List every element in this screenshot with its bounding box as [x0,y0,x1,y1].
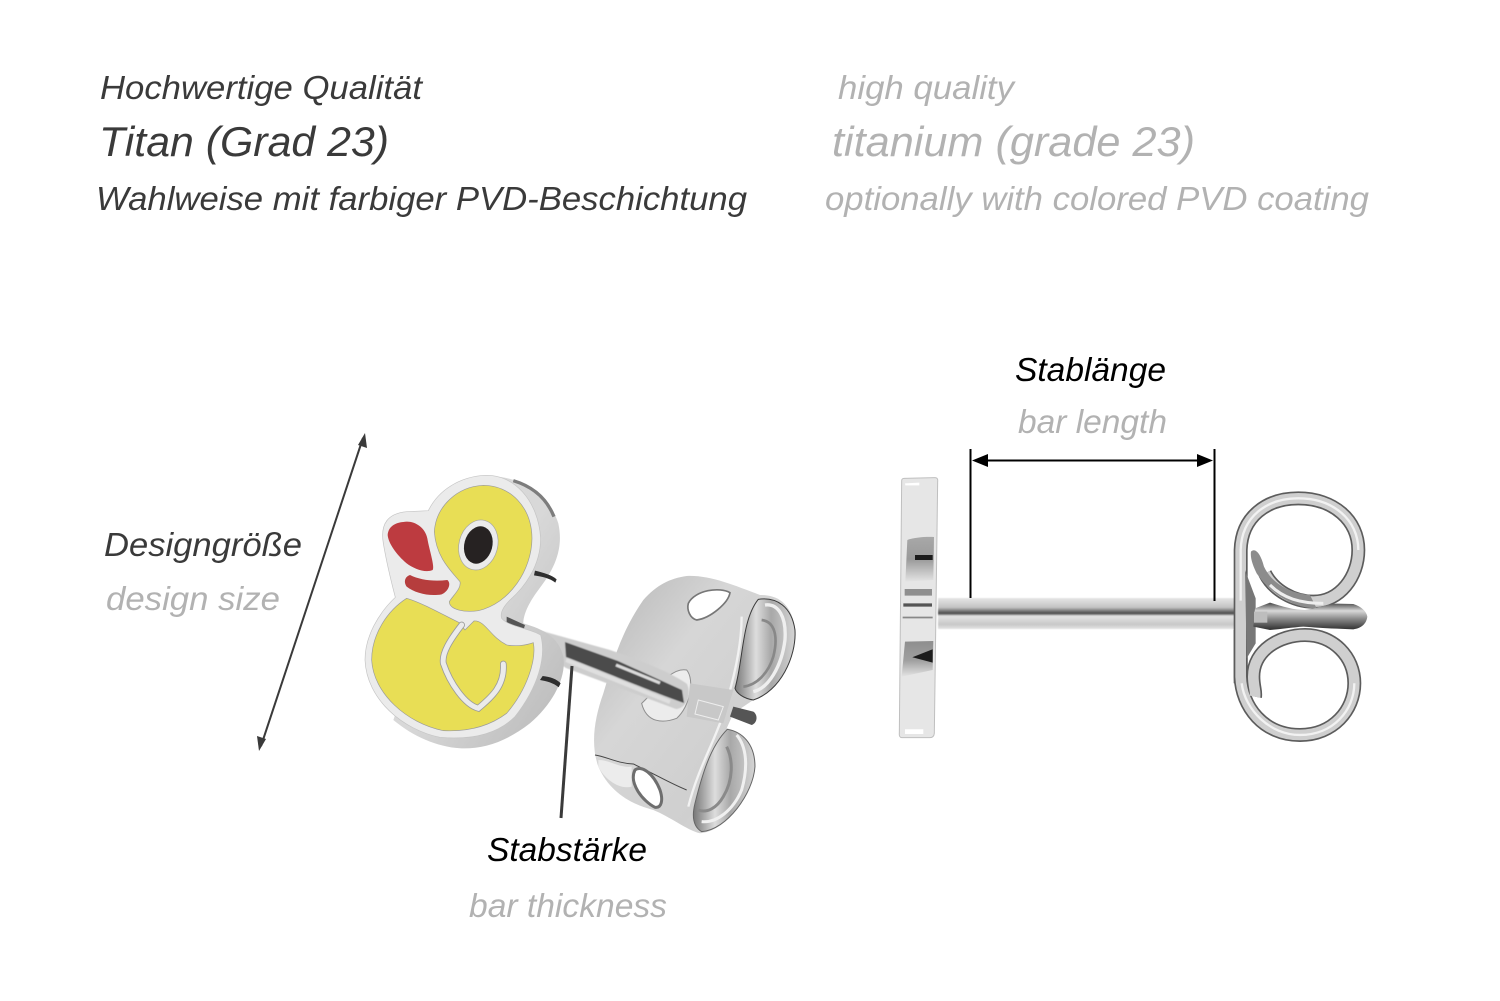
heading: German material: Titan (Grad 23) [99,118,389,165]
duck beak top [388,522,433,571]
duck stud [365,475,564,748]
butterfly back, side view [1237,498,1367,735]
arrow: design size [257,433,367,751]
coil tail [1251,550,1317,608]
plate lower crease [595,755,687,790]
duck side reflection lower [540,676,561,687]
clutch sleeve [687,683,733,723]
upper hole [688,590,730,620]
highlights [905,483,919,485]
label: design size: design size [106,580,280,617]
duck head [434,485,532,611]
post tip [1253,603,1367,630]
heading: English material: titanium (grade 23) [832,118,1195,165]
duck silver face [365,475,543,738]
reflection top [905,537,934,582]
duck side reflection upper [534,571,557,583]
duck wing line [443,625,503,708]
duck metal side [393,477,564,748]
lower coil opening [693,729,755,832]
duck beak bottom [405,575,449,595]
upper coil [1241,498,1358,683]
clutch hole [642,670,691,721]
heading: German quality: Hochwertige Qualität [100,69,424,106]
post end [730,707,757,725]
bar, angled view [524,626,689,709]
back plate [594,576,795,833]
reflection mid [905,589,932,596]
label: bar thickness: bar thickness [469,887,667,924]
duck eye [453,516,504,574]
text: German coating note: Wahlweise mit farbiger PVD-Beschichtung [96,180,748,217]
duck body [372,598,534,731]
label: bar length: bar length [1018,403,1167,440]
lower hole [633,769,662,807]
label: Stabstärke: Stabstärke [487,831,647,868]
bar thickness pointer [561,666,572,818]
reflection bottom [902,641,933,677]
duck side dark rim [513,481,554,517]
dimension: bar length [970,449,1214,601]
stud, side view [899,478,938,738]
text: English coating note: optionally with colored PVD coating [825,180,1370,217]
clutch disk [1245,570,1256,658]
design edge [899,478,938,738]
earring back, angled view [594,576,795,833]
bar meets clutch [1237,601,1245,631]
label: Designgröße: Designgröße [104,526,302,563]
lower coil [1241,630,1354,735]
lower plate highlight [598,760,632,787]
plate right fold edge [688,617,742,807]
bar, side view [938,598,1240,629]
heading: English quality: high quality [838,69,1017,106]
upper coil opening [735,599,795,700]
label: Stablänge: Stablänge [1015,351,1166,388]
